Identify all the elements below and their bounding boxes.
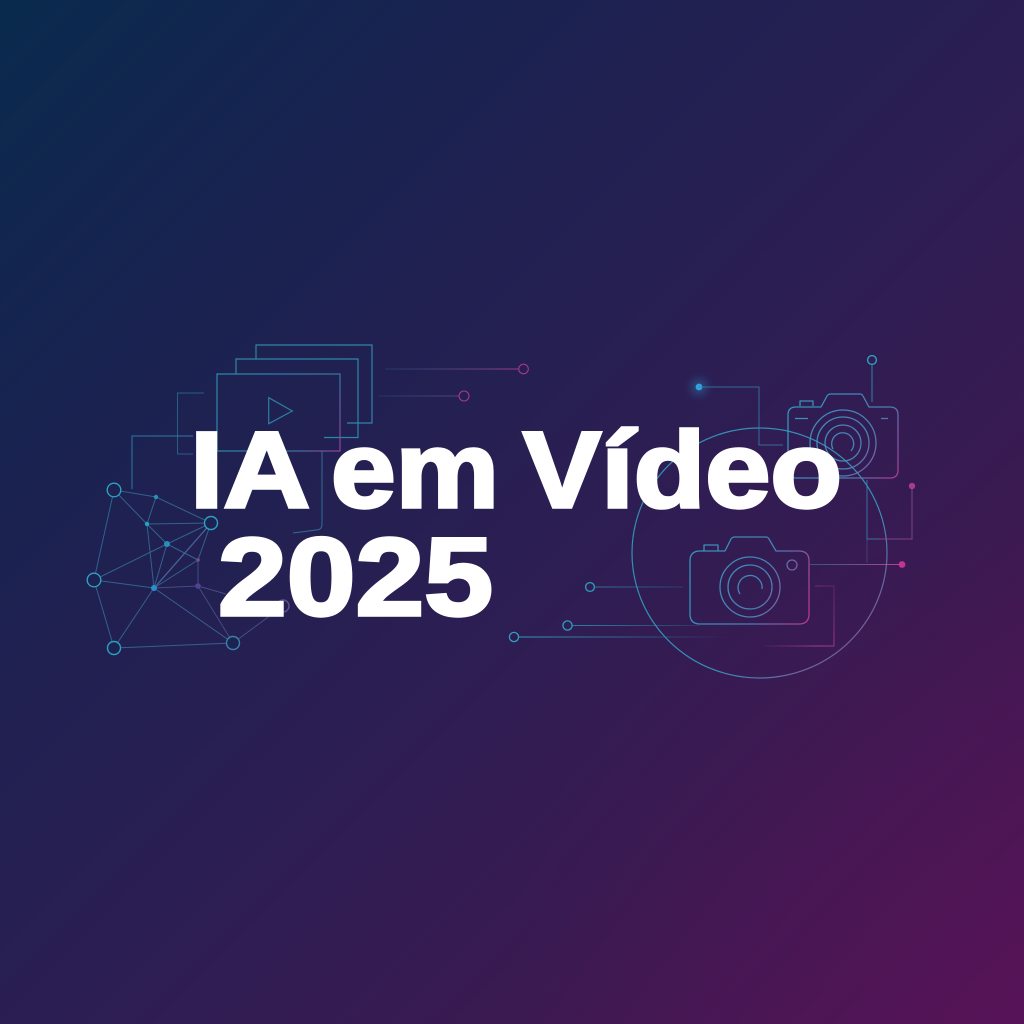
video frames stack — [217, 345, 372, 451]
left connector lines — [132, 393, 322, 533]
front frame — [217, 374, 340, 451]
icon: upper camera — [788, 394, 898, 478]
top connector nodes — [378, 364, 528, 401]
icon: play triangle — [269, 398, 292, 424]
title line 1: IA — [190, 409, 310, 530]
title line 1: Vídeo — [523, 409, 842, 530]
back frame — [256, 345, 372, 423]
network small nodes — [145, 495, 201, 591]
upper camera connectors — [692, 356, 915, 563]
title line 2: 2025 — [218, 516, 493, 639]
middle frame — [236, 359, 358, 438]
network large nodes — [87, 483, 289, 654]
title: IA em Vídeo 2025 — [190, 409, 842, 639]
network edges — [94, 490, 283, 648]
network graph — [87, 483, 289, 654]
large circle — [632, 428, 887, 678]
icon: lower camera — [690, 537, 809, 624]
lower camera connectors — [509, 561, 905, 646]
title line 1: em — [331, 409, 499, 530]
